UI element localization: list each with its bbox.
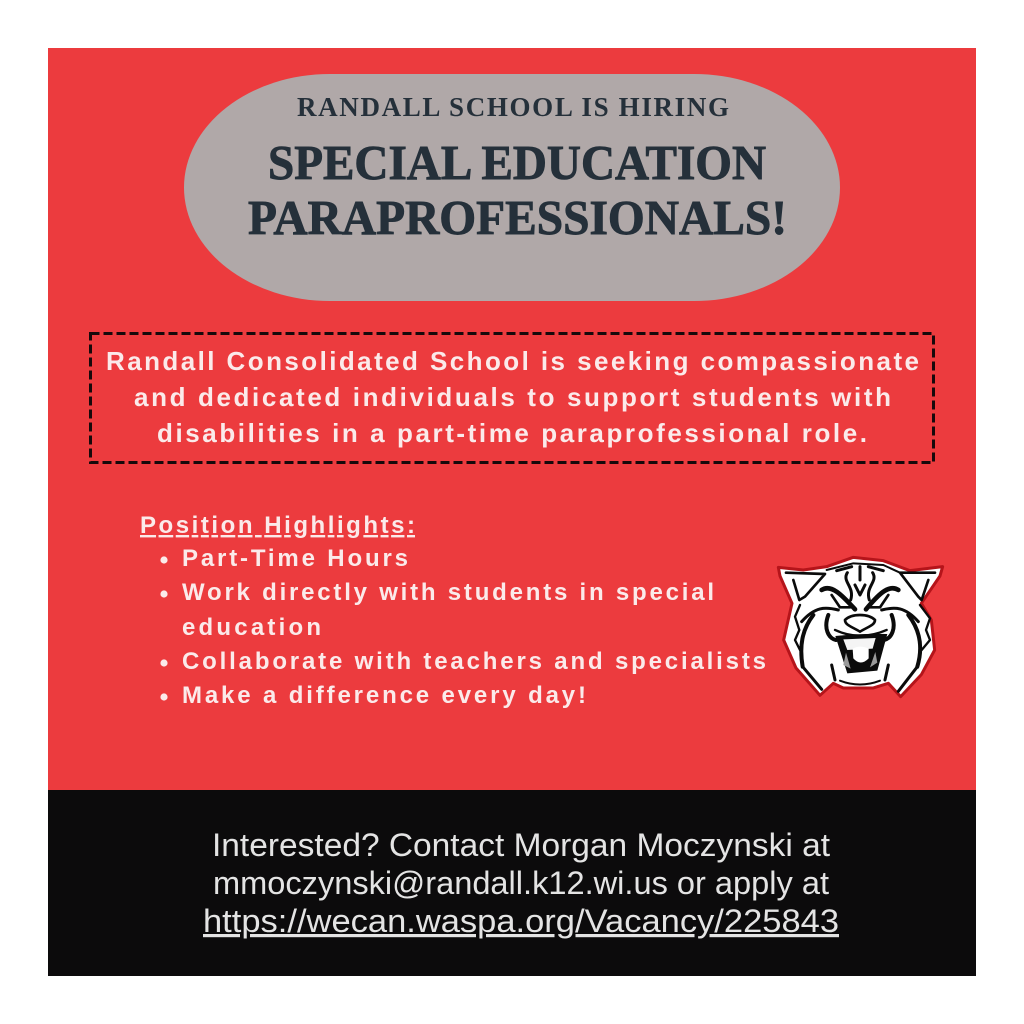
highlights heading: Position Highlights: [140,512,415,539]
bullet: work directly with students: Work directly with students in special [182,579,714,606]
intro line 1: Randall Consolidated School is seeking compassionate [106,346,919,376]
panel: contact footer [48,790,976,976]
title line 1: SPECIAL EDUCATION [268,135,766,190]
bullet: work directly with students: education [182,614,321,641]
title line 2: PARAPROFESSIONALS! [248,190,787,245]
contact line 2: mmoczynski@randall.k12.wi.us or apply at [213,865,829,901]
bullet: part-time hours: Part-Time Hours [182,545,408,572]
eyebrow: Randall School is hiring: RANDALL SCHOOL IS HIRING [297,92,729,122]
mascot mouth [835,634,887,673]
panel: position highlights [140,512,766,709]
bullet: work directly with students [160,579,714,641]
intro line 2: and dedicated individuals to support students with [134,382,891,412]
panel: dashed intro box [90,334,934,462]
panel: red background [48,48,976,790]
panel: title pill [184,74,840,301]
bullet: make a difference: Make a difference every day! [182,682,586,709]
contact line 1: Interested? Contact Morgan Moczynski at [212,827,830,863]
intro line 3: disabilities in a part-time paraprofessional role. [157,418,867,448]
bullet: collaborate: Collaborate with teachers and specialists [182,648,766,675]
icon: wildcat mascot [778,557,943,697]
contact link: https://wecan.waspa.org/Vacancy/225843 [203,903,839,939]
